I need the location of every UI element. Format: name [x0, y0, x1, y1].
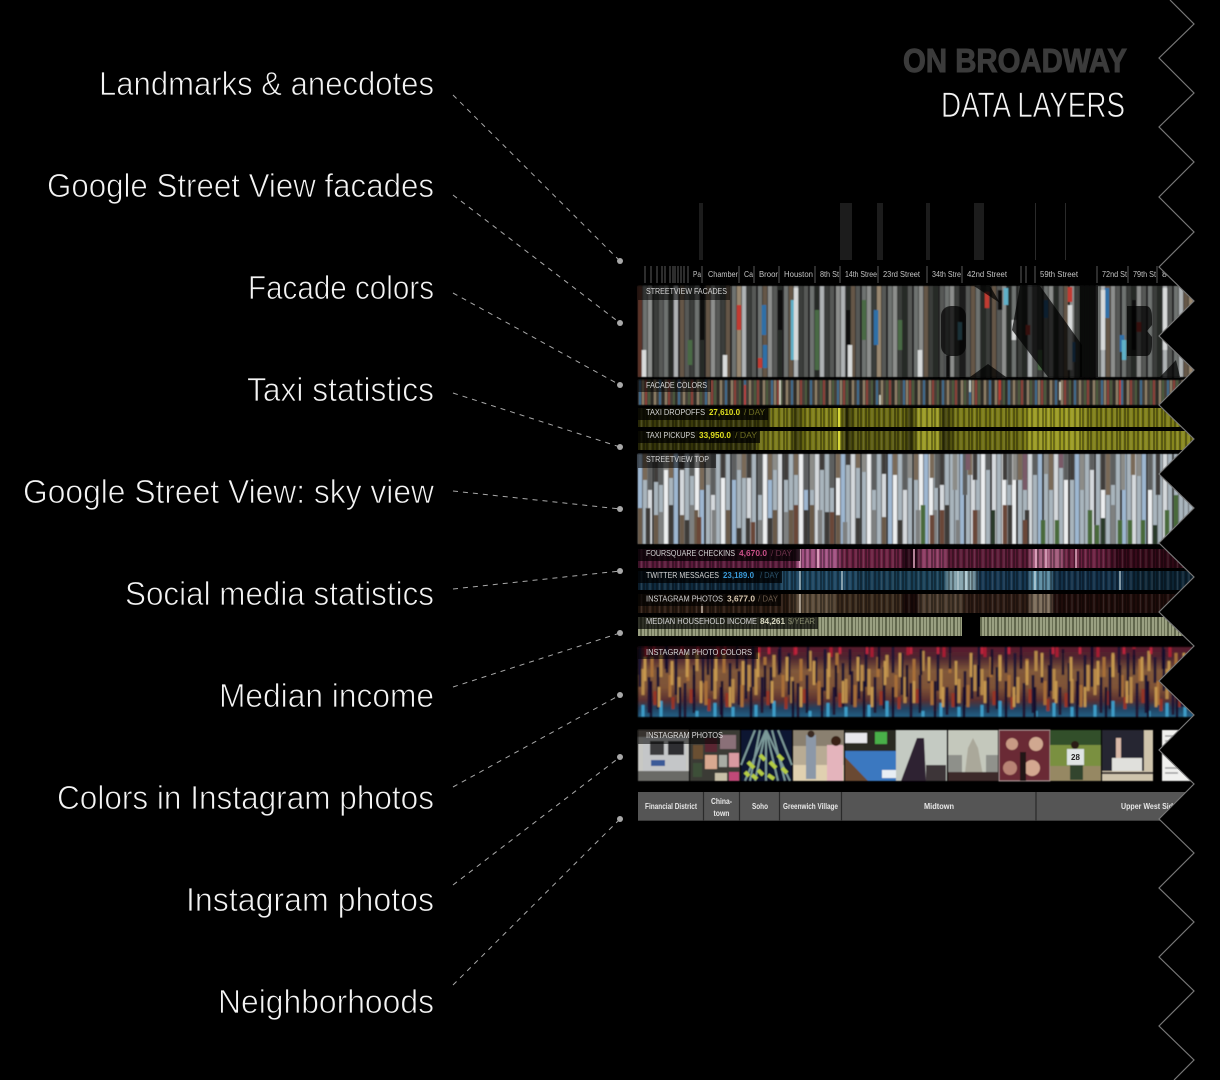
data layers	[638, 203, 1196, 821]
overlay: ONB letters	[941, 286, 1180, 377]
band: streetview facades	[638, 286, 1194, 377]
photo: mirror	[1102, 730, 1153, 781]
label: social: Social media statistics	[125, 575, 434, 612]
band: neighborhoods: Soho	[752, 802, 768, 811]
photo: collage sky	[845, 730, 896, 781]
band: twitter: TWITTER MESSAGES	[646, 571, 719, 580]
band: neighborhoods: Midtown	[924, 802, 954, 811]
band: instagram photos stats	[638, 594, 1194, 613]
band: streetview facades: STREETVIEW FACADES	[646, 287, 727, 296]
band: foursquare: 4,670.0	[739, 549, 768, 558]
photo: two men	[793, 730, 844, 781]
title: DATA LAYERS	[941, 86, 1125, 125]
street labels: Ca	[744, 269, 753, 279]
band: instagram photos	[638, 730, 1196, 781]
label: facades: Google Street View facades	[47, 167, 434, 204]
jersey number: 28	[1071, 753, 1080, 762]
label: income: Median income	[219, 677, 434, 714]
band: twitter: 23,189.0	[723, 571, 755, 580]
photo: flatiron	[896, 730, 947, 781]
band: median income: 84,261	[760, 617, 786, 626]
band: taxi dropoffs	[638, 408, 1194, 427]
street labels: 23rd Street	[883, 269, 921, 279]
building bottoms	[640, 505, 884, 544]
street labels: 42nd Street	[967, 269, 1008, 279]
label: photo colors: Colors in Instagram photos	[57, 779, 434, 816]
photo: posters	[690, 730, 740, 781]
street labels: 79th St	[1133, 269, 1157, 279]
band: taxi pickups: TAXI PICKUPS	[646, 431, 695, 440]
band: instagram photos stats: 3,677.0	[727, 594, 756, 604]
building tops	[650, 454, 1150, 495]
photo: green stalks	[741, 730, 792, 781]
label: sky view: Google Street View: sky view	[23, 473, 434, 510]
street labels: Pa	[693, 269, 701, 279]
photo: selfie collage	[999, 730, 1050, 781]
street labels: Broor	[759, 269, 778, 279]
label: taxi: Taxi statistics	[247, 371, 434, 408]
band: taxi dropoffs: TAXI DROPOFFS	[646, 408, 705, 417]
band: median income: $/YEAR	[788, 617, 815, 626]
title	[903, 42, 1127, 125]
street labels: 8th St	[820, 269, 840, 279]
band: neighborhoods: China-	[711, 797, 732, 806]
band: foursquare: FOURSQUARE CHECKINS	[646, 549, 735, 558]
dashed leader lines with dots	[453, 95, 623, 985]
street labels: 59th Street	[1040, 269, 1079, 279]
band: twitter: / DAY	[760, 571, 780, 580]
label: landmarks: Landmarks & anecdotes	[99, 65, 434, 102]
band: streetview top: STREETVIEW TOP	[646, 455, 709, 464]
landmark bars	[699, 203, 1066, 260]
photo: tower	[948, 730, 998, 781]
photo: park player	[1050, 730, 1101, 781]
band: facade colors	[638, 380, 1194, 405]
band: streetview top	[638, 454, 1194, 544]
band: taxi pickups: / DAY	[735, 431, 758, 440]
label: photos: Instagram photos	[186, 881, 434, 918]
band: instagram photos stats: INSTAGRAM PHOTOS	[646, 594, 723, 604]
zigzag edge	[1159, 0, 1194, 1080]
band: taxi pickups	[638, 431, 1194, 450]
street labels: Houston	[784, 269, 813, 279]
street labels: 8	[1162, 269, 1167, 279]
street labels: 34th Stre	[932, 269, 961, 279]
band: neighborhoods: Greenwich Village	[783, 802, 838, 811]
street labels: 72nd St	[1102, 269, 1128, 279]
band: neighborhoods: Financial District	[645, 802, 697, 811]
title: ON BROADWAY	[903, 42, 1127, 79]
street labels: Chamber	[708, 269, 738, 279]
band: instagram photos stats: / DAY	[758, 594, 779, 604]
band: median income	[638, 617, 1194, 636]
band: taxi dropoffs: / DAY	[744, 408, 766, 417]
photo: van	[638, 730, 689, 781]
band: instagram photos: INSTAGRAM PHOTOS	[646, 731, 723, 740]
band: taxi pickups: 33,950.0	[699, 431, 732, 440]
street labels: 14th Stree	[845, 269, 877, 279]
band: taxi dropoffs: 27,610.0	[709, 408, 741, 417]
sky columns and buildings	[640, 454, 1191, 544]
band: instagram photo colors	[638, 647, 1194, 717]
band: instagram photo colors: INSTAGRAM PHOTO COLORS	[646, 648, 752, 657]
band: facade colors: FACADE COLORS	[646, 381, 707, 390]
photo: white page	[1162, 730, 1196, 781]
band: neighborhoods: town	[714, 809, 730, 818]
label: facade colors: Facade colors	[248, 269, 434, 306]
street labels	[645, 266, 1167, 283]
band: neighborhoods	[638, 792, 1194, 821]
left column labels	[23, 65, 434, 1020]
band: foursquare	[638, 549, 1194, 568]
label: neighborhoods: Neighborhoods	[218, 983, 434, 1020]
band: foursquare: / DAY	[771, 549, 793, 558]
band: median income: MEDIAN HOUSEHOLD INCOME	[646, 617, 757, 626]
band: neighborhoods: Upper West Side	[1121, 802, 1177, 811]
band: twitter	[638, 571, 1194, 590]
